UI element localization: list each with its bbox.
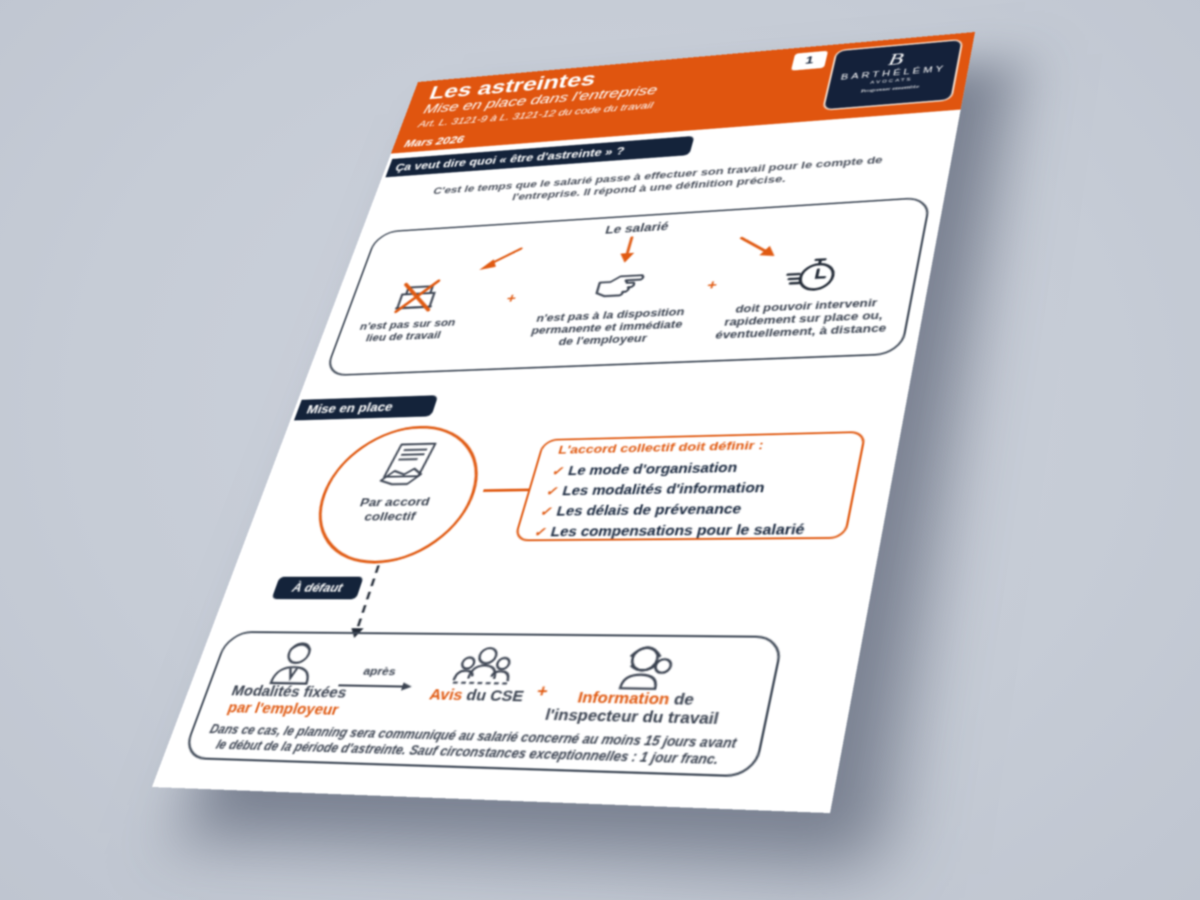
text: col1 <box>358 317 457 344</box>
title: Les astreintes <box>426 68 599 103</box>
circle: par accord collectif <box>298 424 496 564</box>
panel heading: Le salarié <box>604 220 670 236</box>
text: col2: permanente et immédiate <box>530 318 684 337</box>
panel: accord collectif <box>513 431 867 541</box>
text: inspector: Information de <box>575 690 696 709</box>
icon: employer <box>268 562 386 686</box>
text: col3: éventuellement, à distance <box>714 322 888 341</box>
arrows to columns <box>478 235 776 271</box>
page number tab <box>791 51 828 71</box>
text: CSE: Avis du CSE <box>427 687 525 705</box>
connector line <box>483 488 531 492</box>
pill: à défaut: À défaut <box>290 581 345 595</box>
arrow: après: après <box>361 666 397 678</box>
heading pill: definition: Ça veut dire quoi « être d'astreinte » ? <box>394 145 626 173</box>
logo: Progresser ensemble <box>860 83 920 94</box>
circle label <box>358 495 432 523</box>
circle label: Par accord <box>358 495 432 509</box>
text: employer: Modalités fixées <box>229 683 349 702</box>
page number tab: 1 <box>804 54 815 67</box>
footnote: le début de la période d'astreinte. Sauf circonstances exceptionnelles : 1 jour franc. <box>214 736 720 767</box>
text: col2: n'est pas à la disposition <box>535 306 686 324</box>
footnote <box>208 721 738 767</box>
checklist: ✓ Les modalités d'information <box>545 480 766 498</box>
header band <box>391 32 975 154</box>
heading pill: mise en place: Mise en place <box>305 400 395 416</box>
checklist <box>533 460 806 540</box>
icon: CSE group <box>362 562 512 686</box>
panel title: L'accord collectif doit définir : <box>557 438 765 456</box>
logo: AVOCATS <box>870 77 913 85</box>
logo: B <box>887 49 905 70</box>
checklist: ✓ Les compensations pour le salarié <box>533 521 806 539</box>
dashed arrow <box>350 564 381 639</box>
text: col1: lieu de travail <box>364 329 443 344</box>
pill: à défaut <box>271 577 364 599</box>
date: Mars 2026 <box>403 133 466 149</box>
panel: le salarié <box>323 196 932 376</box>
checklist: ✓ Le mode d'organisation <box>550 460 739 478</box>
text: col1: n'est pas sur son <box>358 317 457 332</box>
plus 2: + <box>705 278 719 293</box>
article reference: Art. L. 3121-9 à L. 3121-12 du code du travail <box>417 100 655 129</box>
footnote: Dans ce cas, le planning sera communiqué au salarié concerné au moins 15 jours avant <box>208 721 738 751</box>
icon: document handshake <box>378 442 438 486</box>
logo: BARTHÉLÉMY <box>840 64 947 82</box>
arrow: après <box>337 562 412 692</box>
text: employer: par l'employeur <box>225 700 341 719</box>
text: col2: de l'employeur <box>557 332 648 348</box>
text: col3 <box>714 297 888 341</box>
icon: labour inspector <box>618 645 674 692</box>
text: col2 <box>530 306 686 348</box>
intro text: C'est le temps que le salarié passe à effectuer son travail pour le compte de <box>432 154 884 196</box>
text: col3: doit pouvoir intervenir <box>734 297 878 315</box>
checklist: ✓ Les délais de prévenance <box>539 501 743 519</box>
heading pill: mise en place <box>294 395 438 420</box>
heading pill: definition <box>385 136 695 177</box>
plus 1: + <box>505 292 518 306</box>
icon: pointing hand <box>594 273 646 298</box>
circle label: collectif <box>362 509 418 523</box>
text: inspector: l'inspecteur du travail <box>543 707 720 728</box>
icon: stopwatch <box>785 257 836 292</box>
text: employer <box>225 562 386 719</box>
intro text: l'entreprise. Il répond à une définition précise. <box>511 173 787 203</box>
logo <box>822 39 964 111</box>
page: document sheet <box>152 32 975 813</box>
icon: workplace crossed <box>393 278 442 314</box>
text: col3: rapidement sur place ou, <box>723 309 884 328</box>
panel: default procedure <box>181 631 785 778</box>
subtitle: Mise en place dans l'entreprise <box>421 83 659 117</box>
text: inspector <box>543 690 720 728</box>
plus 3: + <box>535 683 550 701</box>
